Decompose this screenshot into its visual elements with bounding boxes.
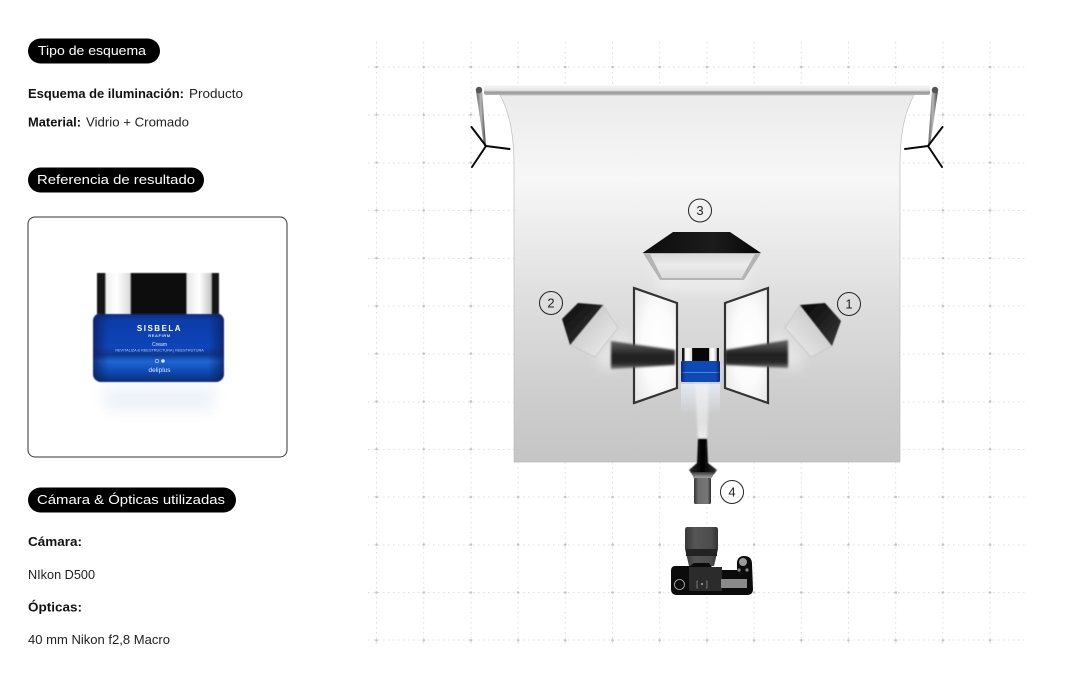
number 1: [838, 292, 860, 316]
heading: Cámara & Ópticas utilizadas: Cámara & Ópticas utilizadas: [37, 492, 226, 507]
heading: Tipo de esquema: [28, 38, 160, 64]
right stand: [905, 87, 942, 167]
number 3: [688, 199, 712, 222]
light 3: overhead softbox: [642, 232, 761, 292]
camera body: [671, 556, 753, 595]
left light beam head: [611, 341, 675, 369]
backdrop: seamless paper: [500, 95, 914, 462]
text: material label: Material:: [28, 114, 81, 130]
text: ópticas label: Ópticas:: [28, 600, 82, 614]
light 2: left softbox: [562, 303, 640, 372]
heading: Referencia de resultado: [28, 168, 204, 192]
text: producto: Producto: [189, 86, 243, 101]
jar label: deliplus: [148, 367, 171, 374]
right light beam head: [725, 340, 788, 368]
text: cámara label: Cámara:: [28, 534, 82, 549]
number 4: [720, 480, 744, 504]
text: esquema de iluminación: Esquema de iluminación:: [28, 86, 184, 101]
right reflector panel: [725, 288, 768, 403]
jar label: REVITALIZA & REESTRUCTURA | REESTRUTURA: [115, 348, 204, 352]
jar lid: [97, 273, 219, 314]
light 1: right softbox: [760, 303, 841, 372]
text: cámara value: NIkon D500: [28, 567, 95, 582]
backdrop rod: [484, 86, 930, 95]
number 3: 3: [696, 203, 704, 218]
grid background: [368, 42, 1026, 646]
number 2: [540, 292, 562, 314]
camera lens top: [685, 527, 718, 566]
number 4: 4: [728, 484, 736, 500]
heading: Referencia de resultado: Referencia de resultado: [37, 172, 195, 187]
left stand: [472, 87, 510, 167]
camera: [671, 527, 753, 595]
light path to camera: [681, 384, 720, 438]
left reflector panel: [634, 288, 677, 403]
jar label: [115, 324, 204, 374]
number 1: 1: [845, 296, 853, 312]
jar label: Cream: [152, 342, 167, 348]
jar label: REAFIRM: [148, 333, 171, 338]
jar reflection: [100, 386, 218, 412]
jar label: SISBELA: [137, 324, 182, 333]
number 2: 2: [547, 296, 555, 310]
text: material value: Vidrio + Cromado: [86, 114, 189, 130]
text: ópticas value: 40 mm Nikon f2,8 Macro: [28, 632, 170, 647]
panel: result reference photo: [28, 217, 287, 457]
lens: [689, 439, 717, 504]
heading: Cámara & Ópticas utilizadas: [28, 488, 236, 512]
heading: Tipo de esquema: Tipo de esquema: [38, 43, 147, 58]
product jar on set: [681, 348, 720, 382]
jar body: [93, 313, 224, 382]
